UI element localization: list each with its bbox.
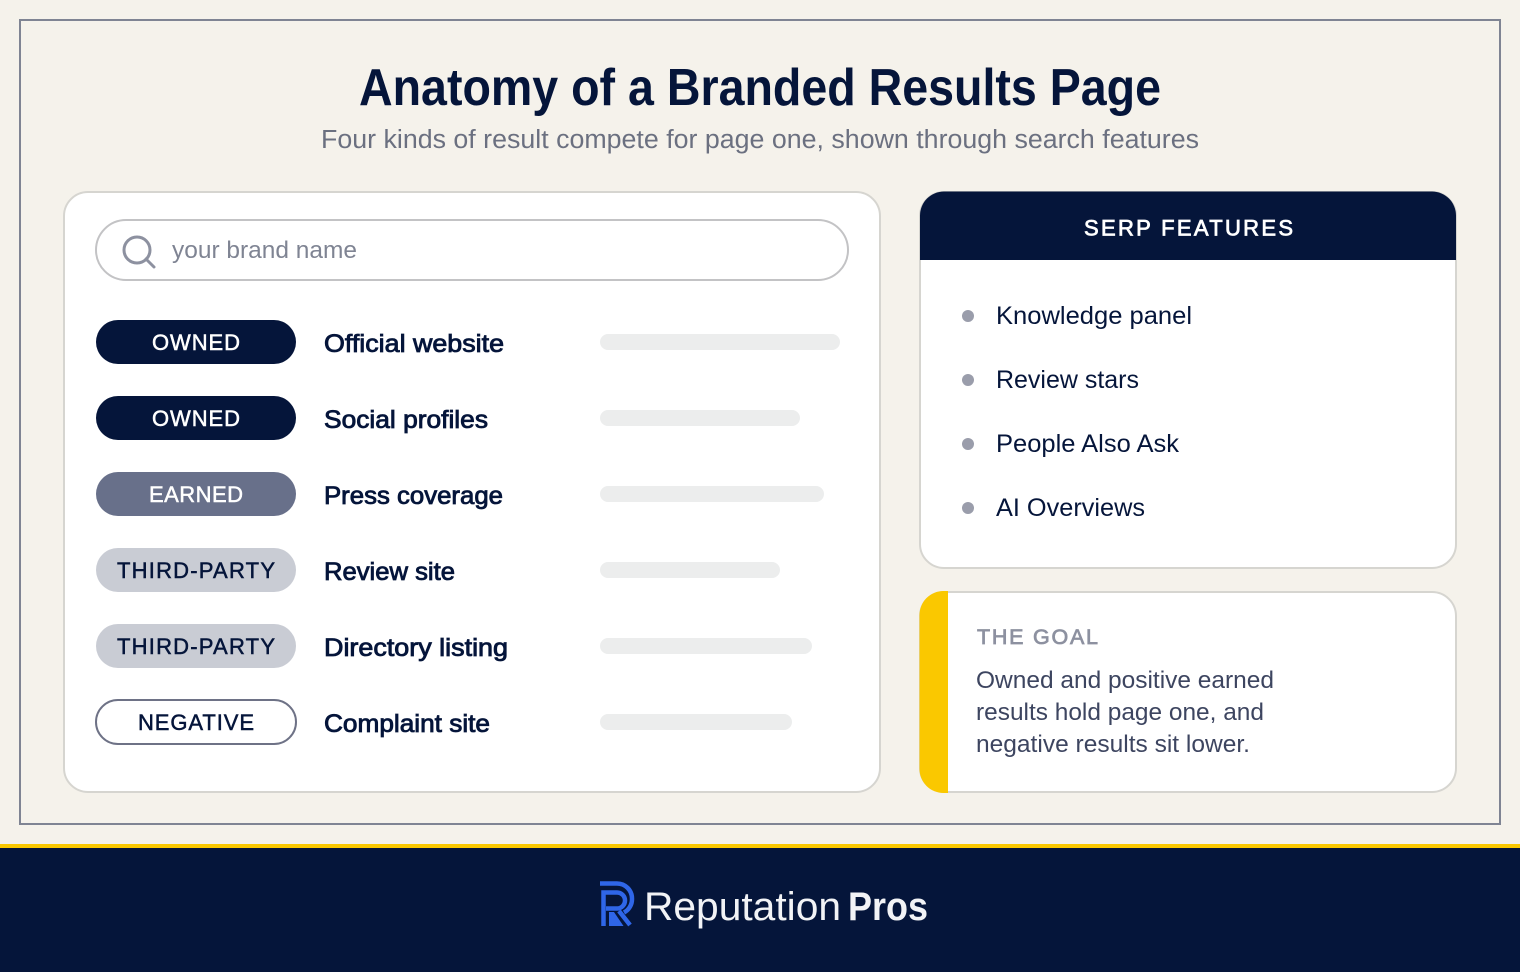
row: official website: OWNED [152,330,240,355]
row: directory listing: Directory listing [324,634,508,662]
panel header [920,192,1456,260]
row: social profiles [96,396,800,440]
footer [0,844,1520,972]
goal text: results hold page one, and [976,699,1264,726]
row: press coverage: Press coverage [324,482,503,510]
row: complaint site: Complaint site [324,710,490,738]
row: directory listing [96,624,812,668]
title: Anatomy of a Branded Results Page [359,59,1161,117]
icon: R mark [600,884,632,926]
row: complaint site: NEGATIVE [138,710,254,735]
subtitle: Four kinds of result compete for page one, shown through search features [321,126,1199,154]
goal text: Owned and positive earned [976,667,1274,694]
wordmark: Reputation: Reputation [644,885,841,929]
row: review site: Review site [324,558,455,586]
panel: search results [64,192,880,792]
row: review site: THIRD-PARTY [117,558,275,583]
row: review site [96,548,780,592]
header label: SERP FEATURES [1084,216,1293,240]
row: complaint site [96,700,792,744]
row: social profiles: Social profiles [324,406,488,434]
feature: AI overviews: AI Overviews [996,494,1145,522]
feature: people also ask: People Also Ask [996,430,1179,458]
search placeholder: your brand name [172,237,357,264]
goal text: negative results sit lower. [976,731,1250,758]
feature: knowledge panel: Knowledge panel [996,302,1192,330]
wordmark: Pros: Pros [848,885,928,929]
row: official website: Official website [324,330,504,358]
icon: magnifying glass [124,237,154,267]
search bar [96,220,848,280]
panel: the goal [920,591,1456,793]
yellow accent bar [920,591,948,793]
row: social profiles: OWNED [152,406,240,431]
row: press coverage: EARNED [149,482,243,507]
feature: review stars: Review stars [996,366,1139,394]
goal label: THE GOAL [977,625,1098,649]
row: directory listing: THIRD-PARTY [117,634,275,659]
goal text [976,667,1274,758]
footer accent line [0,844,1520,848]
panel: SERP features [920,192,1456,568]
row: official website [96,320,840,364]
row: press coverage [96,472,824,516]
logo [600,884,928,929]
